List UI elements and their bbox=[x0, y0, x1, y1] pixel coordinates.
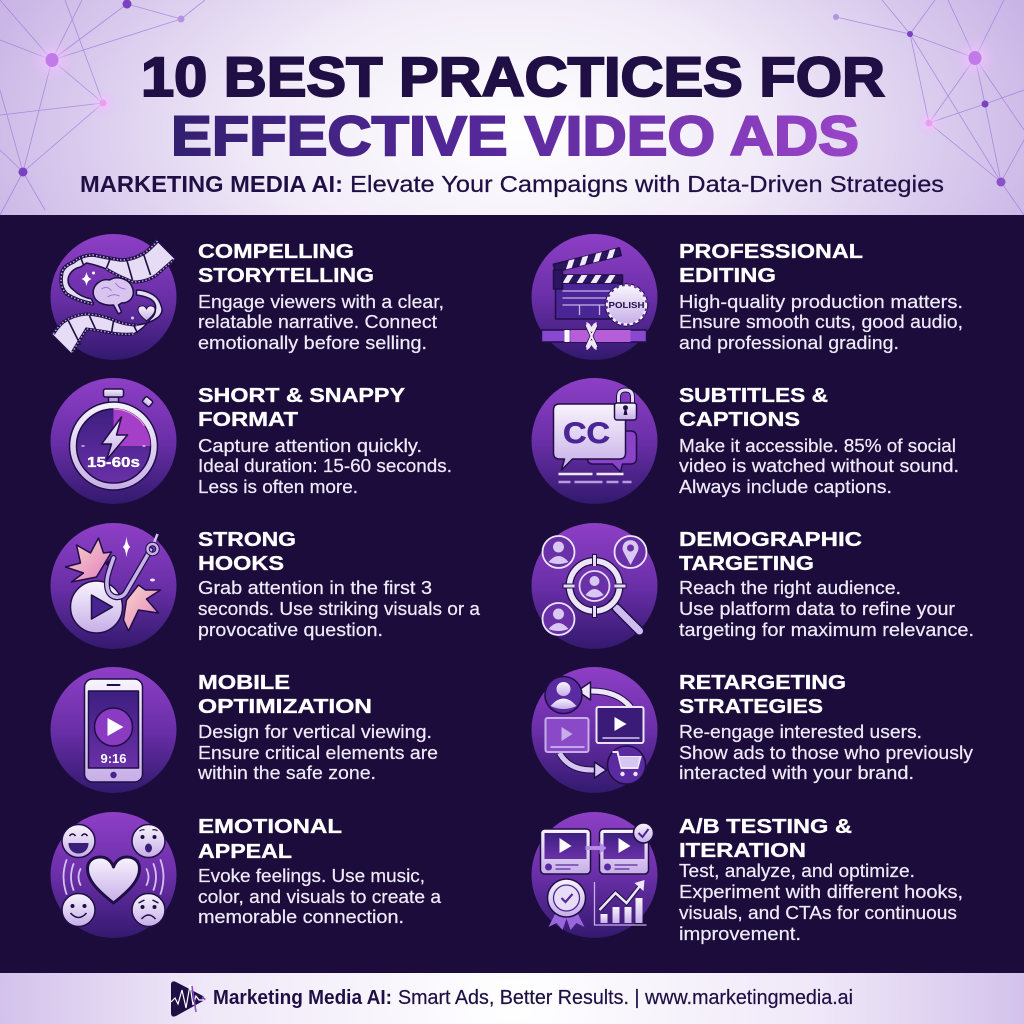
header panel bbox=[0, 0, 1024, 215]
description: Grab attention in the first 3 bbox=[198, 577, 432, 598]
heading: SUBTITLES & bbox=[679, 384, 828, 407]
description: video is watched without sound. bbox=[679, 455, 959, 476]
description bbox=[198, 291, 444, 353]
subtitle bbox=[80, 171, 944, 197]
title: EFFECTIVE VIDEO ADS bbox=[171, 104, 859, 167]
icon: caption bubbles with lock bbox=[532, 378, 658, 504]
heading bbox=[198, 384, 405, 431]
description: within the safe zone. bbox=[197, 762, 376, 783]
icon: video test, medal and growth chart bbox=[532, 812, 658, 938]
description: provocative question. bbox=[198, 619, 383, 640]
icon: film strip and brain bbox=[50, 234, 176, 360]
description: High-quality production matters. bbox=[679, 291, 963, 312]
description: Use platform data to refine your bbox=[679, 598, 955, 619]
description: Capture attention quickly. bbox=[198, 435, 422, 456]
heading: APPEAL bbox=[198, 840, 292, 863]
heading bbox=[679, 671, 846, 718]
heading: EDITING bbox=[679, 264, 776, 287]
description bbox=[198, 577, 481, 640]
icon: clapperboard with polish badge bbox=[532, 234, 658, 360]
description: Test, analyze, and optimize. bbox=[679, 860, 915, 881]
item: subtitles and captions bbox=[532, 378, 959, 504]
heading: PROFESSIONAL bbox=[679, 240, 863, 263]
description: Show ads to those who previously bbox=[679, 742, 974, 763]
description bbox=[679, 291, 963, 353]
description: seconds. Use striking visuals or a bbox=[198, 598, 481, 619]
description: targeting for maximum relevance. bbox=[679, 619, 974, 640]
description bbox=[198, 865, 442, 927]
heading bbox=[198, 815, 342, 863]
heading bbox=[679, 815, 852, 862]
heading: MOBILE bbox=[198, 671, 290, 694]
description: visuals, and CTAs for continuous bbox=[679, 902, 957, 923]
item: mobile optimization bbox=[50, 667, 438, 793]
heading bbox=[679, 240, 863, 287]
description bbox=[679, 721, 974, 783]
heading: EMOTIONAL bbox=[198, 815, 342, 838]
description bbox=[679, 860, 963, 944]
heading: RETARGETING bbox=[679, 671, 846, 694]
item: demographic targeting bbox=[532, 523, 974, 649]
footer text: Smart Ads, Better Results. | www.marketingmedia.ai bbox=[398, 986, 853, 1009]
footer text bbox=[213, 986, 853, 1009]
heading: SHORT & SNAPPY bbox=[198, 384, 405, 407]
icon: phone with play button bbox=[50, 667, 176, 793]
heading: FORMAT bbox=[198, 408, 299, 431]
heading bbox=[679, 384, 828, 431]
item: compelling storytelling bbox=[50, 234, 444, 360]
icon: heart and faces bbox=[50, 812, 176, 938]
description: color, and visuals to create a bbox=[198, 886, 442, 907]
icon: phone with play button: 9:16 bbox=[100, 751, 126, 766]
icon: logo bbox=[171, 981, 206, 1017]
description: Evoke feelings. Use music, bbox=[198, 865, 425, 886]
description: Always include captions. bbox=[679, 476, 892, 497]
heading: STRONG bbox=[198, 528, 296, 551]
heading bbox=[198, 528, 296, 575]
description: and professional grading. bbox=[679, 332, 899, 353]
heading: OPTIMIZATION bbox=[198, 695, 372, 718]
item: retargeting strategies bbox=[532, 667, 974, 793]
icon: stopwatch bbox=[50, 378, 176, 504]
footer panel bbox=[0, 973, 1024, 1024]
description bbox=[198, 435, 452, 497]
heading: HOOKS bbox=[198, 552, 284, 575]
item: professional editing bbox=[532, 234, 963, 360]
description: Reach the right audience. bbox=[679, 577, 901, 598]
heading: TARGETING bbox=[679, 552, 814, 575]
icon: stopwatch: 15-60s bbox=[87, 455, 140, 471]
heading: CAPTIONS bbox=[679, 408, 800, 431]
network graphic: left bbox=[0, 0, 205, 215]
description: Ensure smooth cuts, good audio, bbox=[679, 311, 963, 332]
icon: caption bubbles with lock: CC bbox=[563, 417, 610, 450]
item: emotional appeal bbox=[50, 812, 442, 938]
description: Less is often more. bbox=[198, 476, 358, 497]
icon: hook and play ball bbox=[50, 523, 176, 649]
subtitle: MARKETING MEDIA AI: bbox=[80, 171, 343, 197]
heading: STORYTELLING bbox=[198, 264, 374, 287]
icon: target, magnifier and audience bbox=[532, 523, 658, 649]
item: short and snappy format bbox=[50, 378, 452, 504]
heading bbox=[198, 240, 374, 287]
description: Make it accessible. 85% of social bbox=[679, 435, 956, 456]
description: improvement. bbox=[679, 923, 801, 944]
description bbox=[197, 721, 438, 783]
title: 10 BEST PRACTICES FOR bbox=[141, 45, 885, 108]
description: emotionally before selling. bbox=[198, 332, 427, 353]
heading: ITERATION bbox=[679, 839, 806, 862]
description bbox=[679, 435, 959, 497]
heading: STRATEGIES bbox=[679, 695, 823, 718]
description: Ideal duration: 15-60 seconds. bbox=[198, 455, 452, 476]
footer text: Marketing Media AI: bbox=[213, 986, 392, 1009]
heading: A/B TESTING & bbox=[679, 815, 852, 838]
subtitle: Elevate Your Campaigns with Data-Driven Strategies bbox=[350, 171, 944, 197]
network graphic: right bbox=[833, 0, 1024, 215]
description: Engage viewers with a clear, bbox=[198, 291, 444, 312]
icon: clapperboard with polish badge: POLISH bbox=[608, 300, 644, 310]
description: interacted with your brand. bbox=[679, 762, 914, 783]
heading bbox=[198, 671, 372, 718]
description: Experiment with different hooks, bbox=[679, 881, 963, 902]
heading bbox=[679, 528, 862, 575]
item: strong hooks bbox=[50, 523, 481, 649]
description: Design for vertical viewing. bbox=[198, 721, 432, 742]
icon: retargeting cycle bbox=[532, 667, 658, 793]
heading: COMPELLING bbox=[198, 240, 354, 263]
description bbox=[679, 577, 974, 640]
heading: DEMOGRAPHIC bbox=[679, 528, 862, 551]
description: relatable narrative. Connect bbox=[198, 311, 437, 332]
item: a/b testing and iteration bbox=[532, 812, 963, 944]
description: Ensure critical elements are bbox=[198, 742, 438, 763]
title bbox=[141, 45, 885, 167]
description: Re-engage interested users. bbox=[679, 721, 922, 742]
description: memorable connection. bbox=[198, 906, 404, 927]
